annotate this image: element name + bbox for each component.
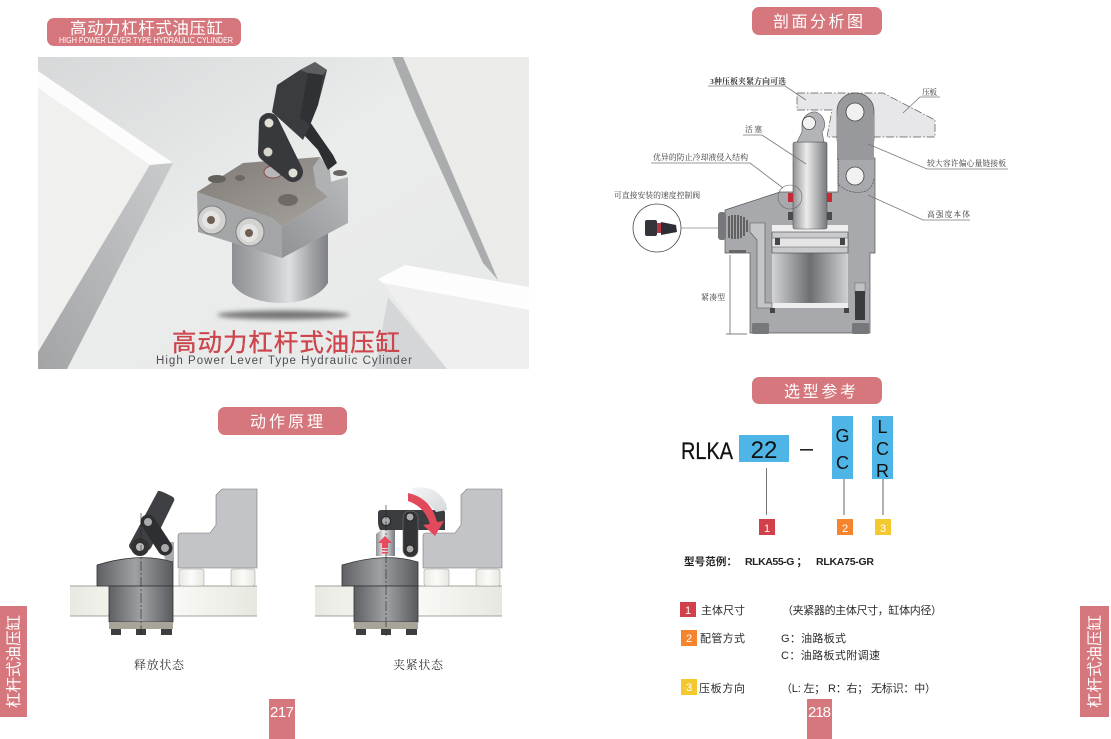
callout: coolant seal: 优异的防止冷却液侵入结构 bbox=[653, 152, 748, 162]
side tab left bbox=[0, 606, 27, 717]
page number 218: 218 bbox=[808, 704, 831, 721]
diagram: model code: C bbox=[876, 439, 889, 459]
diagram: model code: 22 bbox=[751, 437, 777, 464]
text: model examples: RLKA55-G ； bbox=[745, 556, 807, 568]
legend: item 3 clamp direction: （L: 左； R：右； 无标识：中） bbox=[781, 681, 936, 695]
heading: action principle bbox=[218, 407, 347, 435]
heading: left page title badge: 高动力杠杆式油压缸 bbox=[70, 18, 223, 38]
legend: item 2 piping: 配管方式 bbox=[700, 631, 745, 645]
heading: model selection bbox=[752, 377, 882, 404]
text: model examples: RLKA75-GR bbox=[816, 556, 874, 568]
page number 217: 217 bbox=[270, 704, 294, 721]
legend: item 1 body size: 1 bbox=[685, 605, 691, 617]
callout: link plate: 较大容许偏心量链接板 bbox=[927, 158, 1006, 168]
side tab right bbox=[1080, 606, 1109, 717]
text: model examples bbox=[684, 555, 874, 568]
icon: red swing arrow bbox=[408, 493, 444, 536]
text: photo caption Chinese: 高动力杠杆式油压缸 bbox=[172, 329, 400, 357]
icon: red up arrow bbox=[378, 536, 392, 554]
side tab right: 杠杆式油压缸 bbox=[1085, 615, 1104, 708]
page number 218 bbox=[807, 699, 832, 739]
diagram: model code: 3 bbox=[880, 523, 886, 535]
callout: body: 高强度本体 bbox=[927, 209, 970, 219]
icon: hydraulic cylinder product bbox=[197, 62, 349, 320]
legend: item 1 body size: 主体尺寸 bbox=[701, 603, 745, 617]
diagram: model code: R bbox=[876, 461, 889, 481]
legend: item 2 piping: C：油路板式附调速 bbox=[781, 648, 880, 662]
dimension: compact height bbox=[701, 255, 747, 334]
callout: speed valve: 可直接安装的速度控制阀 bbox=[614, 190, 700, 200]
diagram: model code bbox=[681, 416, 893, 535]
icon: speed control valve inset bbox=[633, 204, 718, 252]
callout: piston: 活塞 bbox=[745, 124, 762, 134]
chart: cutaway cross-section bbox=[718, 93, 935, 334]
panel: product photo bbox=[38, 57, 529, 369]
heading: left page title badge: HIGH POWER LEVER TYPE HYDRAULIC CYLINDER bbox=[59, 36, 233, 45]
heading: action principle: 动作原理 bbox=[250, 413, 323, 431]
chart: clamped state diagram bbox=[315, 487, 502, 636]
legend: item 2 piping: G：油路板式 bbox=[781, 631, 846, 645]
legend: item 3 clamp direction bbox=[681, 679, 936, 695]
heading: model selection: 选型参考 bbox=[784, 383, 856, 401]
diagram: model code: C bbox=[836, 453, 849, 473]
callout: link plate bbox=[868, 144, 1008, 169]
chart: released state diagram bbox=[70, 489, 257, 636]
diagram: model code: RLKA bbox=[681, 438, 733, 465]
diagram: model code: G bbox=[835, 426, 850, 446]
legend: item 2 piping bbox=[681, 630, 880, 662]
legend: item 1 body size bbox=[680, 602, 942, 617]
diagram: model code: 1 bbox=[764, 523, 770, 535]
callout: piston bbox=[743, 124, 806, 164]
diagram: model code: L bbox=[877, 417, 888, 437]
text: clamped state label: 夹紧状态 bbox=[393, 657, 444, 672]
heading: section analysis: 剖面分析图 bbox=[773, 13, 863, 31]
heading: section analysis bbox=[752, 7, 882, 35]
text: released state label: 释放状态 bbox=[134, 657, 185, 672]
legend: item 1 body size: （夹紧器的主体尺寸，缸体内径） bbox=[782, 603, 942, 617]
callout: clamp direction: 3种压板夹紧方向可选 bbox=[710, 76, 786, 86]
heading: left page title badge bbox=[47, 18, 241, 46]
legend: item 3 clamp direction: 3 bbox=[686, 682, 692, 694]
diagram: model code: 2 bbox=[842, 523, 848, 535]
callout: clamp direction bbox=[708, 76, 806, 100]
legend: item 2 piping: 2 bbox=[686, 633, 692, 645]
callout: clamp plate: 压板 bbox=[922, 87, 937, 97]
page number 217 bbox=[269, 699, 295, 739]
callout: body bbox=[868, 195, 970, 220]
callout: coolant seal bbox=[651, 152, 783, 188]
side tab left: 杠杆式油压缸 bbox=[4, 615, 23, 708]
icon: swing motion fan bbox=[412, 487, 447, 512]
legend: item 3 clamp direction: 压板方向 bbox=[699, 681, 745, 695]
callout: clamp plate bbox=[903, 87, 940, 113]
dimension: compact height: 紧凑型 bbox=[701, 292, 725, 302]
text: model examples: 型号范例： bbox=[684, 555, 737, 568]
text: photo caption English: High Power Lever Type Hydraulic Cylinder bbox=[156, 355, 412, 367]
